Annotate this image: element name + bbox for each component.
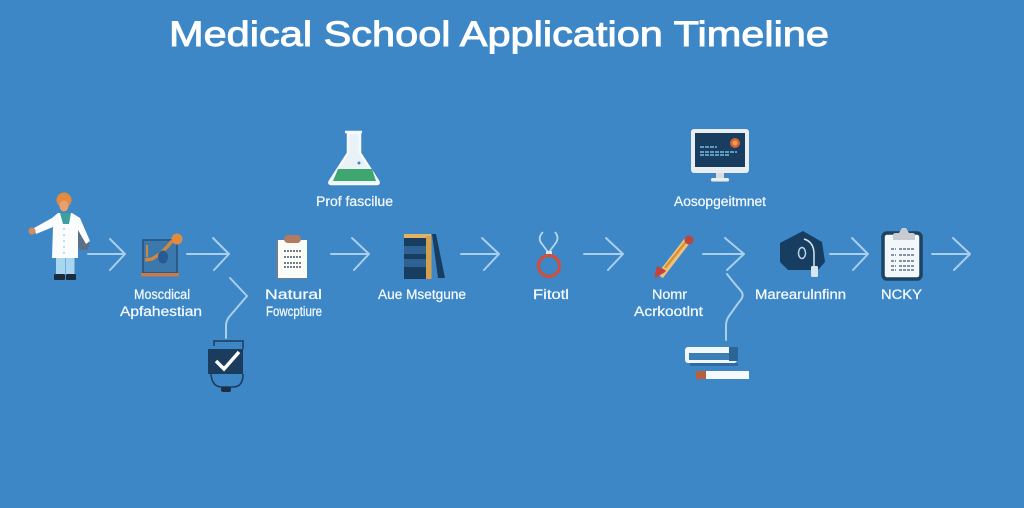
branch arrow down to book and bar bbox=[726, 274, 743, 340]
label: nomr acrkootlnt: Nomr bbox=[652, 287, 688, 302]
label: natural fowcptiure: Natural bbox=[265, 287, 322, 302]
icon: flask bbox=[329, 132, 379, 184]
icon: monitor bbox=[691, 129, 749, 182]
label: medical application: Moscdical bbox=[134, 287, 190, 302]
icon: doctor figure bbox=[28, 192, 90, 280]
branch arrow down to checklist bbox=[226, 278, 247, 338]
arrow 6 bbox=[703, 238, 744, 270]
label: aosopgeitmnet: Aosopgeitmnet bbox=[674, 194, 766, 209]
icon: books bbox=[404, 234, 445, 279]
label: natural fowcptiure: Fowcptiure bbox=[266, 304, 322, 319]
icon: checklist clipboard bbox=[883, 228, 921, 279]
label: medical application bbox=[120, 287, 202, 319]
icon: medical application frame bbox=[141, 234, 182, 276]
arrow 3 bbox=[331, 238, 369, 270]
arrow 7 bbox=[830, 238, 868, 270]
label: prof fascilue: Prof fascilue bbox=[316, 194, 393, 209]
icon: dark hexagon with tube bbox=[780, 231, 825, 277]
label: fitotl: Fitotl bbox=[533, 287, 569, 302]
icon: stethoscope bbox=[538, 232, 560, 276]
label: medical application: Apfahestian bbox=[120, 304, 202, 319]
label: ncky: NCKY bbox=[881, 287, 922, 302]
icon: pencil bbox=[656, 236, 694, 276]
title: Medical School Application Timeline bbox=[169, 15, 829, 54]
label: natural fowcptiure bbox=[265, 287, 322, 319]
icon: clipboard bbox=[276, 235, 307, 279]
arrow 8 bbox=[932, 238, 970, 270]
label: marearulnfinn: Marearulnfinn bbox=[755, 287, 846, 302]
arrow 2 bbox=[187, 238, 229, 270]
arrow 1 bbox=[88, 239, 125, 270]
label: aue msetgune: Aue Msetgune bbox=[378, 287, 466, 302]
icon: dark check badge bbox=[208, 341, 243, 392]
arrow 4 bbox=[461, 238, 499, 270]
label: nomr acrkootlnt bbox=[634, 287, 703, 319]
arrow 5 bbox=[584, 238, 623, 270]
icon: stacked book and bar bbox=[685, 347, 749, 379]
label: nomr acrkootlnt: Acrkootlnt bbox=[634, 304, 703, 319]
